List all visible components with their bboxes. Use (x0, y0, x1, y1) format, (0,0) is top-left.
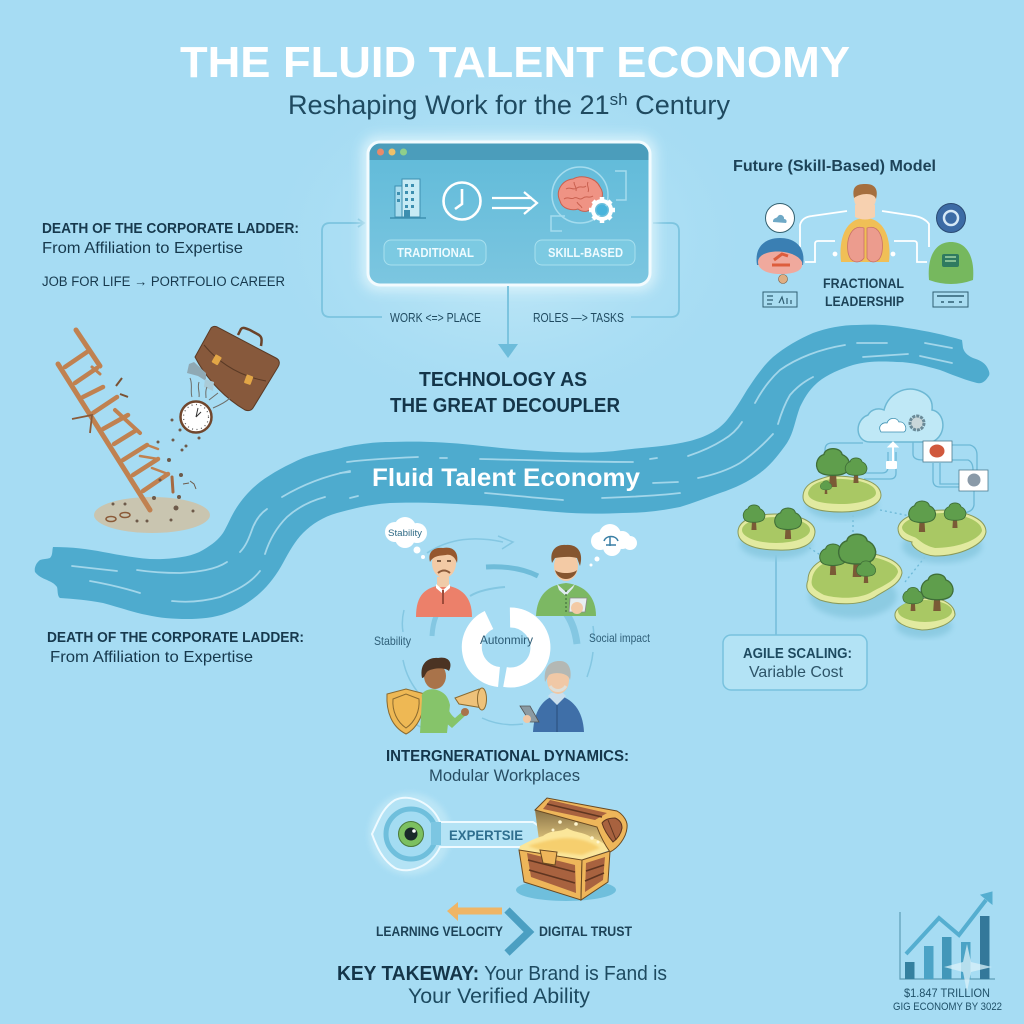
person: green sweater with tablet (536, 524, 637, 616)
title: THE FLUID TALENT ECONOMY (180, 38, 850, 87)
text block: corporate ladder intro: JOB FOR LIFE → PORTFOLIO CAREER (42, 274, 285, 289)
heading: intergenerational dynamics: INTERGNERATIONAL DYNAMICS: (386, 748, 629, 765)
chest lock (540, 850, 557, 865)
text block: corporate ladder intro (42, 221, 299, 289)
chest lid (535, 798, 627, 852)
person: shield and megaphone (387, 658, 486, 734)
label: roles to tasks: ROLES —> TASKS (533, 311, 624, 325)
heading: technology as the great decoupler: TECHNOLOGY AS (419, 369, 587, 391)
person: orange shirt (385, 517, 472, 617)
label: digital trust: DIGITAL TRUST (539, 924, 633, 939)
label: fractional leadership: LEADERSHIP (825, 294, 904, 309)
label: stability: Stability (374, 634, 411, 648)
person: orange shirt: Stability (388, 528, 422, 539)
key takeaway: Your Verified Ability (408, 985, 590, 1008)
chart: gig economy growth (893, 892, 1002, 1013)
panel: expertise key and chest (337, 793, 667, 1008)
background glow (248, 50, 768, 430)
callout: agile scaling (723, 635, 867, 690)
rubble (112, 418, 200, 522)
panel: agile scaling islands (723, 389, 988, 690)
label: skill-based: SKILL-BASED (548, 245, 623, 260)
chart: gig economy growth: GIG ECONOMY BY 3022 (893, 1001, 1002, 1013)
person: grey hair in blue suit (520, 661, 584, 732)
treasure (519, 813, 610, 860)
center ring (472, 617, 540, 677)
label: autonomy: Autonmiry (480, 633, 533, 647)
heading: technology as the great decoupler (390, 369, 621, 417)
heading: technology as the great decoupler: THE GREAT DECOUPLER (390, 395, 621, 417)
arrow down (498, 286, 518, 358)
label: expertise: EXPERTSIE (449, 827, 523, 843)
island: center (807, 534, 902, 618)
label: social impact: Social impact (589, 631, 651, 645)
icon card: brain (923, 441, 952, 462)
icon: clock (444, 182, 480, 220)
icon: double arrow (492, 192, 537, 214)
panel: intergenerational cycle (374, 517, 651, 785)
callout: agile scaling: AGILE SCALING: (743, 646, 852, 662)
arrow up into cloud (886, 442, 898, 469)
chevron: blue (507, 910, 529, 953)
icon: treasure chest (516, 798, 627, 901)
chart: gig economy growth: $1.847 TRILLION (904, 986, 990, 1000)
island: left (738, 505, 815, 559)
label: skill-based (535, 240, 635, 265)
text block: corporate ladder lower: DEATH OF THE CORPORATE LADDER: (47, 630, 304, 646)
island: right (898, 501, 986, 563)
text block: corporate ladder intro: From Affiliation to Expertise (42, 240, 243, 257)
ladder rails and rungs (58, 330, 173, 510)
chest side (581, 851, 610, 900)
chest front (519, 850, 582, 900)
text block: corporate ladder intro: DEATH OF THE CORPORATE LADDER: (42, 221, 299, 237)
cycle rings (402, 536, 594, 732)
subtitle: sh (610, 90, 628, 109)
right person (929, 204, 973, 307)
cloud (858, 389, 943, 442)
panel: technology window with connector loops (322, 136, 679, 358)
icon: briefcase (187, 326, 279, 411)
subtitle: Reshaping Work for the 21 (288, 90, 609, 120)
illustration: broken ladder (58, 326, 279, 533)
text block: corporate ladder lower: From Affiliation to Expertise (50, 649, 253, 666)
connectors (800, 211, 929, 262)
icon: stopwatch (180, 402, 212, 432)
key takeaway: KEY TAKEWAY: Your Brand is Fand is (337, 963, 667, 985)
label: fractional leadership: FRACTIONAL (823, 276, 904, 291)
heading: Future (Skill-Based) Model (733, 158, 936, 175)
connector loops (322, 219, 679, 317)
river: fluid talent economy (35, 325, 989, 619)
sand patch (94, 497, 210, 533)
panel: future skill-based model (733, 158, 973, 309)
label: learning velocity: LEARNING VELOCITY (376, 924, 503, 939)
key takeaway (337, 963, 667, 1008)
arrow: orange left (447, 902, 502, 921)
text block: corporate ladder lower (47, 630, 304, 666)
chest interior (535, 810, 608, 850)
center person with brain (840, 184, 890, 262)
icon: office building (390, 179, 426, 218)
subtitle: Century (628, 90, 730, 120)
island network lines (776, 442, 977, 635)
label: work to place: WORK <=> PLACE (390, 311, 481, 325)
callout: agile scaling: Variable Cost (749, 664, 844, 681)
icon card: chip (959, 470, 988, 491)
island: top (803, 449, 881, 520)
island: lower right (895, 574, 955, 638)
label: traditional (384, 240, 486, 265)
subheading: modular workplaces: Modular Workplaces (429, 766, 580, 785)
label: traditional: TRADITIONAL (397, 245, 474, 260)
river label: Fluid Talent Economy (372, 464, 640, 492)
left person (757, 204, 803, 307)
icon: brain and gear (551, 167, 626, 231)
icon: key with eye (369, 793, 546, 875)
label: fractional leadership (823, 276, 904, 309)
